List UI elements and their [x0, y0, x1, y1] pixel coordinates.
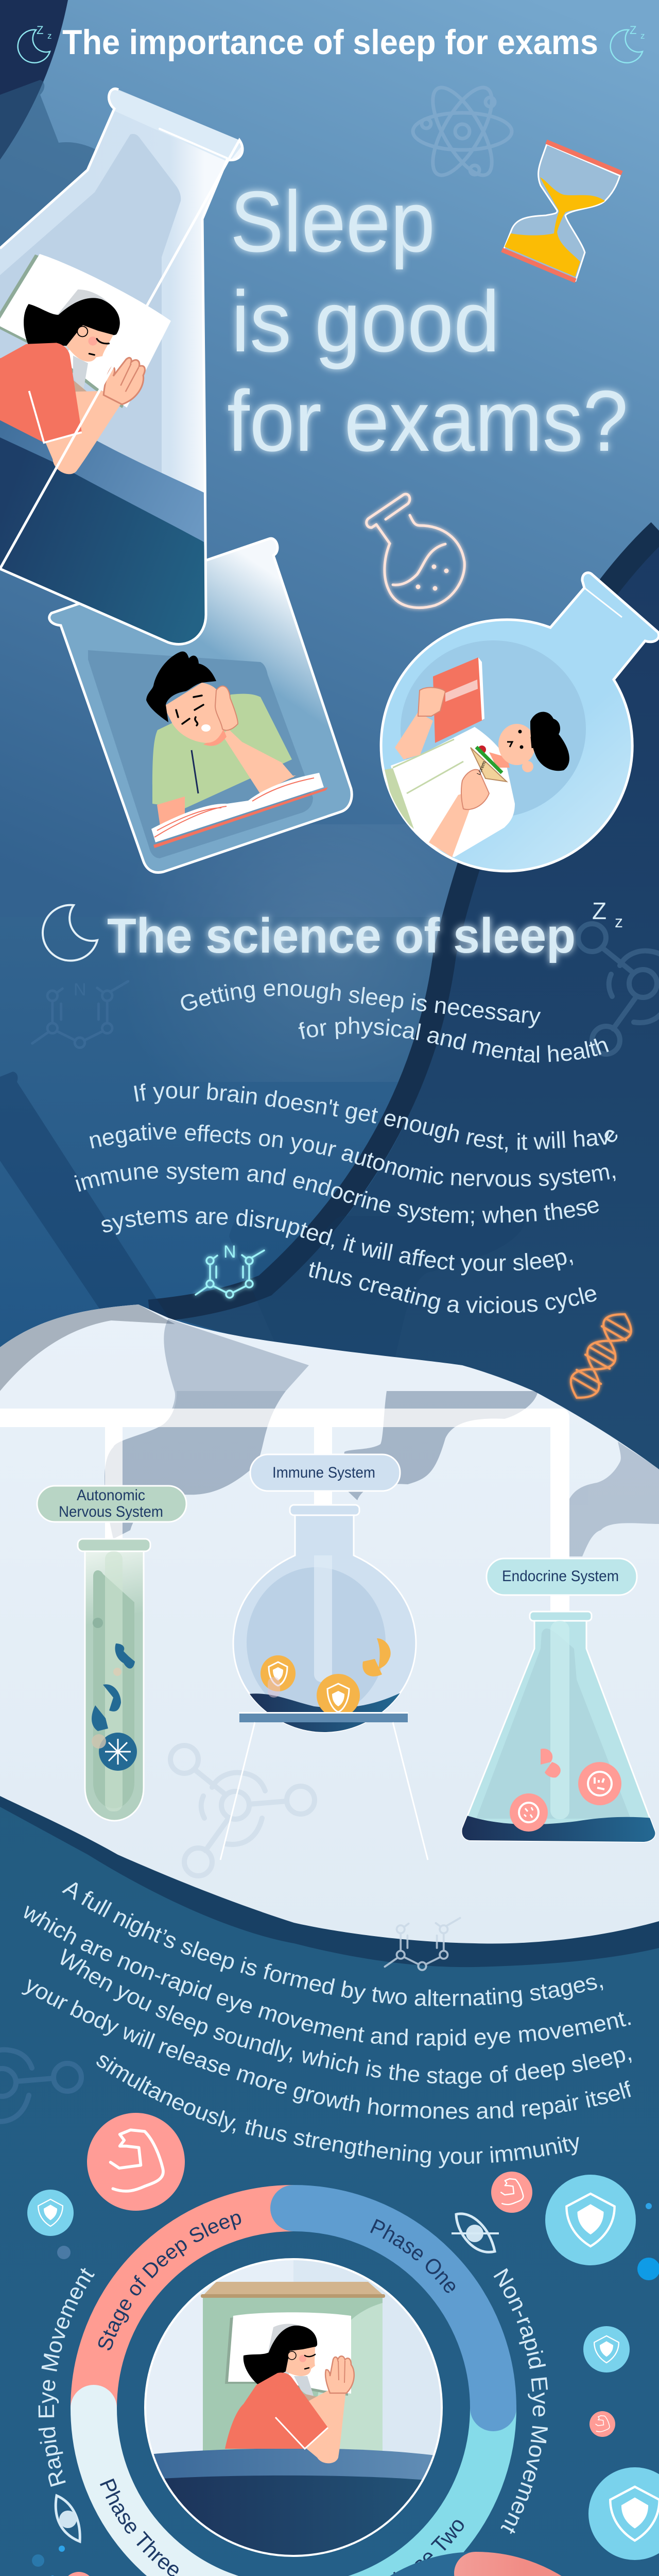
left arc shading	[0, 1304, 175, 1391]
neck and face	[489, 752, 510, 768]
label: autonomic: Nervous System	[59, 1503, 163, 1520]
flask stand	[220, 1712, 428, 1860]
big question heading: Sleep	[230, 173, 435, 270]
outer ring labels: Rapid Eye Movement	[34, 2263, 99, 2490]
open book	[151, 773, 324, 842]
corner dark shape	[0, 0, 68, 160]
intro paragraph	[72, 975, 659, 1318]
sandwich	[471, 748, 507, 782]
bottle inner glass	[0, 134, 181, 495]
bottle silhouette	[0, 1072, 174, 1350]
red book	[433, 657, 483, 743]
intro text: which are non-rapid eye movement and rapid eye movement.	[24, 1905, 631, 2050]
boy arm	[227, 731, 294, 778]
faint molecule left	[32, 980, 128, 1048]
blue cell	[99, 1733, 137, 1771]
intro paragraph: thus creating a vicious cycle	[309, 1262, 597, 1314]
ring: adolescents	[333, 2573, 618, 2576]
big question heading: for exams?	[227, 372, 628, 469]
round flask with reading man	[381, 573, 659, 871]
beaker with sleepy boy	[49, 538, 352, 872]
floating cells: shields	[27, 2175, 659, 2576]
smoke shapes	[105, 1319, 659, 1556]
intro text	[18, 1875, 659, 2169]
test tube	[78, 1539, 150, 1821]
round-bottom flask	[233, 1505, 416, 1741]
intro paragraph: systems are disrupted, it will affect your sleep,	[101, 1209, 573, 1276]
heading: z	[615, 912, 623, 931]
outer ring labels: Non-rapid Eye Movement	[488, 2264, 553, 2538]
man hair	[530, 712, 569, 771]
intro paragraph: for physical and mental health	[299, 1017, 609, 1062]
intro paragraph: If your brain doesn't get enough rest, it will have	[134, 1083, 618, 1153]
floating cells: muscles	[63, 2113, 615, 2576]
boy hand	[215, 686, 238, 731]
icon: neon molecule: N	[223, 1242, 236, 1262]
intro text: A full night’s sleep is formed by two alternating stages,	[62, 1883, 603, 2007]
big question heading: is good	[231, 273, 500, 370]
pipes	[0, 1409, 569, 1611]
band under lab	[0, 1777, 659, 1967]
heading	[43, 897, 623, 963]
icon: eye left	[56, 2496, 80, 2541]
DNA neon	[564, 1307, 638, 1405]
icon: moon left: z	[47, 31, 51, 41]
label: autonomic	[37, 1486, 186, 1522]
intro text: When you sleep soundly, which is the stage of deep sleep,	[61, 1948, 631, 2089]
heading: Z	[592, 897, 606, 924]
intro paragraph: Getting enough sleep is necessary	[181, 983, 541, 1028]
smoke over pipes	[105, 1391, 538, 1539]
panel: hero	[0, 0, 659, 1494]
ring labels: Phase One	[367, 2214, 464, 2298]
bottle with sleeping woman	[0, 88, 247, 670]
heading: The science of sleep	[107, 908, 576, 963]
icon: neon molecule	[196, 1242, 264, 1298]
sleeping scene large	[139, 2251, 453, 2561]
woman in bottle	[0, 254, 171, 474]
intro paragraph: immune system and endocrine system; when these	[74, 1164, 599, 1226]
icon: moon left: Z	[37, 24, 43, 37]
pink cells	[510, 1749, 621, 1832]
icon: moon right	[611, 24, 645, 63]
faint molecule	[170, 1745, 315, 1876]
faint molecule lower	[385, 1918, 460, 1970]
fist	[418, 687, 445, 716]
icon: atom	[413, 79, 512, 183]
intro text: simultaneously, thus strengthening your immunity	[92, 2047, 583, 2169]
bottle shadow silhouette	[0, 80, 118, 371]
big question heading	[227, 173, 628, 469]
dark backdrop right	[172, 535, 659, 1494]
round flask with reading man: Lorem	[476, 760, 488, 776]
intro paragraph: negative effects on your autonomic nervous system,	[90, 1123, 616, 1190]
icon: moon right: Z	[630, 24, 636, 37]
icon: neon flask	[367, 494, 464, 608]
icon: eye right	[452, 2214, 499, 2252]
intro text: your body will release more growth hormones and repair itself	[22, 1979, 631, 2120]
icon: moon right: z	[640, 31, 645, 41]
label: endocrine: Endocrine System	[502, 1568, 619, 1585]
icon: hourglass	[502, 142, 622, 281]
man arm	[395, 712, 433, 759]
liquid	[0, 437, 205, 643]
yellow cells	[261, 1638, 391, 1717]
boy face	[164, 683, 223, 743]
lab background	[0, 1304, 659, 1944]
man shirt	[391, 727, 515, 857]
icon: moon left	[18, 24, 51, 63]
faint molecule left: N	[74, 980, 86, 999]
ring labels	[85, 2206, 501, 2576]
ring: sleep phases	[94, 2208, 493, 2576]
label: immune	[250, 1454, 400, 1491]
dark band	[149, 531, 659, 1311]
floating dots	[32, 2203, 659, 2576]
title: The importance of sleep for exams	[62, 23, 598, 62]
label: immune: Immune System	[272, 1464, 375, 1481]
faint molecule right	[578, 924, 659, 1054]
middle layer	[0, 420, 204, 550]
faint wave silhouette	[229, 1209, 525, 1377]
boy hair	[146, 651, 216, 722]
panel: lab	[0, 1304, 659, 1970]
beaker inner	[88, 650, 313, 858]
ring labels: Stage of Deep Sleep	[93, 2206, 245, 2354]
flask inner	[401, 640, 586, 818]
label: autonomic: Autonomic	[77, 1487, 145, 1504]
panel: the science of sleep	[0, 897, 659, 1377]
faint branch	[0, 2023, 81, 2153]
panel: sleep cycle	[0, 1875, 659, 2576]
boy shirt	[152, 694, 292, 808]
label: endocrine	[487, 1558, 637, 1595]
bottle rim	[110, 90, 241, 161]
outer ring labels	[34, 2168, 553, 2576]
erlenmeyer flask	[458, 1612, 659, 1844]
